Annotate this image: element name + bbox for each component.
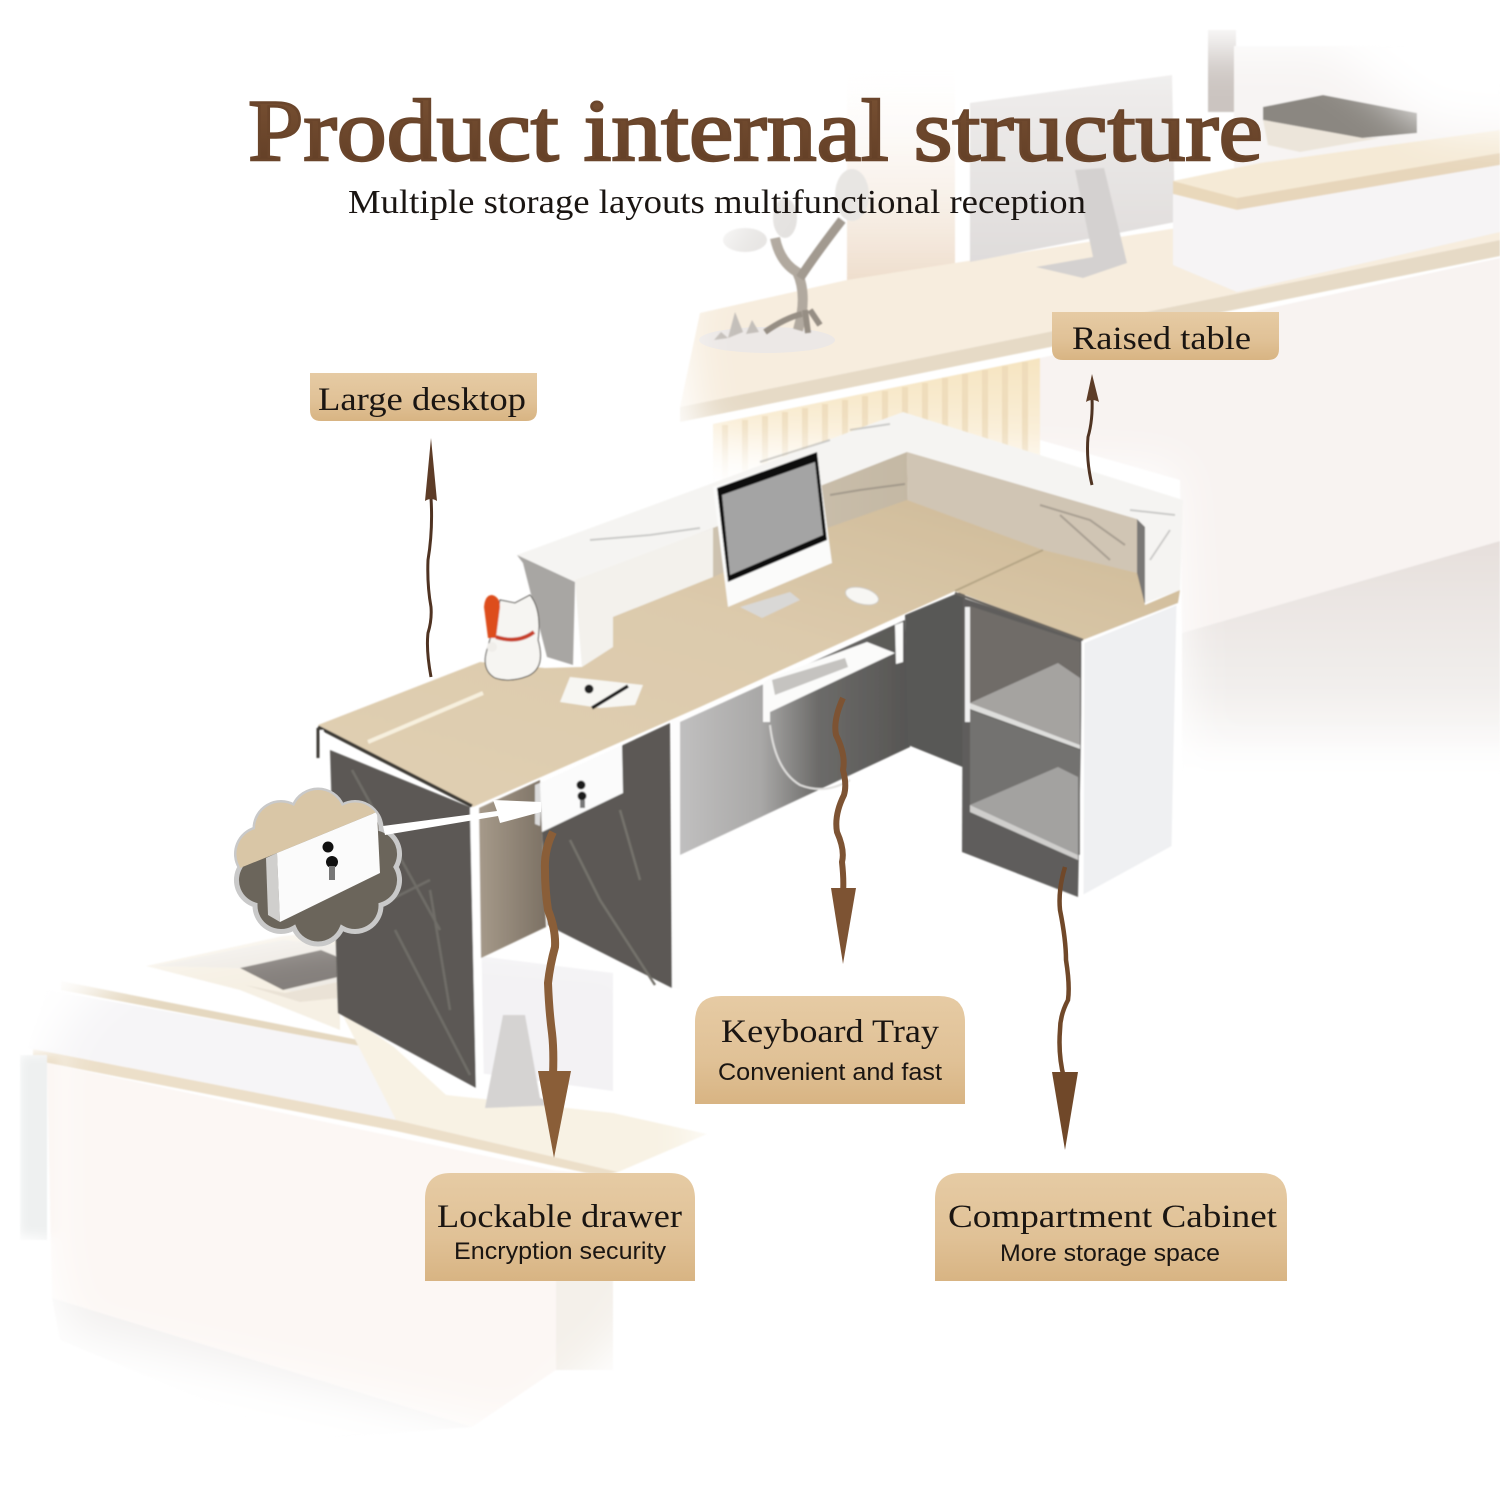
desk: cabinet interior — [962, 598, 1083, 897]
desk: monitor — [713, 452, 832, 618]
title: Product internal structure — [248, 83, 1263, 180]
desk: paper and pen — [560, 677, 643, 708]
label: raised table — [1052, 312, 1279, 360]
desk: keyboard tray — [763, 622, 903, 722]
label: compartment cabinet: Compartment Cabinet — [948, 1199, 1277, 1235]
label: keyboard tray — [695, 996, 965, 1104]
desk: left dark panel — [330, 750, 484, 1090]
arrow: large desktop — [425, 438, 437, 677]
white arrow — [383, 800, 541, 835]
label: raised table: Raised table — [1072, 321, 1251, 357]
drawer zoom callout — [220, 780, 541, 944]
arrow: raised table — [1086, 374, 1099, 485]
label: large desktop: Large desktop — [318, 382, 526, 418]
desk: lucky cat — [484, 595, 540, 680]
background: top-right reception room scene — [680, 30, 1500, 780]
label: lockable drawer: Lockable drawer — [437, 1199, 682, 1235]
arrow: lockable drawer — [538, 832, 571, 1158]
desk: riser end block — [517, 528, 713, 668]
arrow: compartment cabinet — [1052, 867, 1078, 1150]
label: compartment cabinet: More storage space — [1000, 1240, 1220, 1267]
desk: lockable drawer — [535, 745, 623, 832]
background: bottom-left reception room scene — [20, 930, 707, 1440]
label: large desktop — [310, 373, 537, 421]
arrow: keyboard tray — [831, 698, 856, 964]
desk: marble counter top — [517, 412, 1183, 603]
label: lockable drawer — [425, 1173, 695, 1281]
desk: front dark panel — [540, 720, 680, 990]
background: sculpture — [699, 169, 869, 353]
label: compartment cabinet — [935, 1173, 1287, 1281]
desk: wood inner side — [479, 780, 546, 958]
desk: white side panel — [1082, 603, 1178, 897]
zoom bubble — [234, 788, 402, 946]
desk: wooden top — [318, 500, 1180, 807]
desk: mouse — [844, 584, 880, 608]
subtitle: Multiple storage layouts multifunctional reception — [348, 184, 1086, 221]
label: keyboard tray: Convenient and fast — [718, 1059, 942, 1086]
reception desk illustration — [318, 412, 1183, 1090]
label: keyboard tray: Keyboard Tray — [721, 1014, 940, 1050]
desk: marble modesty panel — [680, 590, 965, 855]
desk: riser inner faces — [575, 452, 1145, 640]
label: lockable drawer: Encryption security — [454, 1238, 666, 1265]
